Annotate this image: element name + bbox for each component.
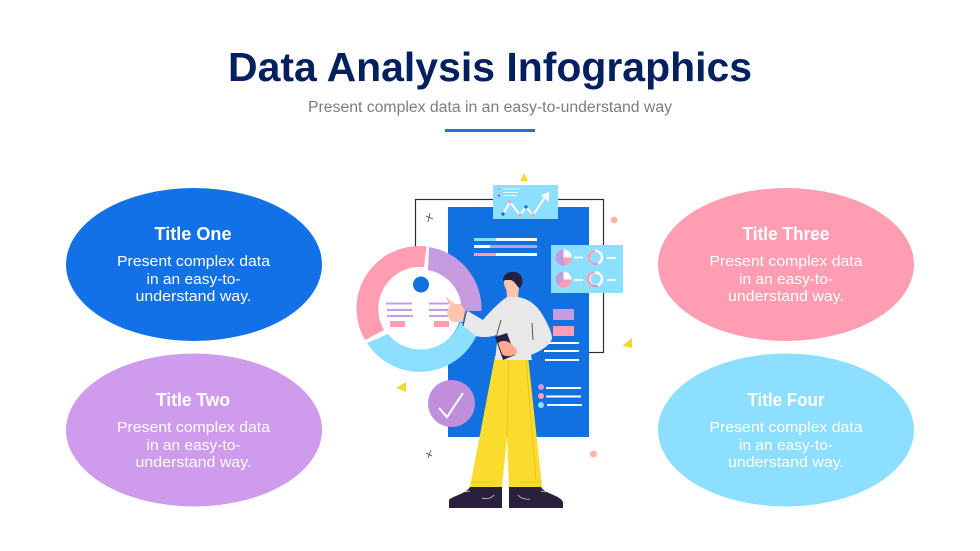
panel: title four: understand way. (728, 454, 844, 471)
accent line (445, 129, 535, 132)
decorative accents (396, 173, 632, 458)
line chart card (493, 185, 558, 219)
phone and hand (495, 333, 515, 360)
panel: title two: Title Two (156, 390, 230, 410)
panel: title two: understand way. (136, 454, 252, 471)
panel: title four: Title Four (748, 390, 824, 410)
illustration: analyst with charts (357, 173, 632, 508)
panel: title one (66, 188, 322, 341)
panel: title two: in an easy-to- (146, 437, 240, 454)
panel: title one: in an easy-to- (146, 271, 240, 288)
pie charts card (551, 245, 623, 293)
panel: title two (66, 354, 322, 506)
hand (445, 296, 465, 322)
document blocks and lines (538, 309, 582, 408)
document text bars (474, 238, 537, 256)
shoes (449, 487, 563, 508)
panel: title three: Present complex data (710, 253, 863, 270)
panel: title three: Title Three (742, 224, 830, 244)
panel: title three: understand way. (728, 288, 844, 305)
panel: title two: Present complex data (117, 419, 271, 436)
panel: title three: in an easy-to- (739, 271, 833, 288)
panel: title three (658, 188, 914, 341)
panel: title four: in an easy-to- (739, 437, 833, 454)
panel: title four (658, 354, 914, 506)
title: Data Analysis Infographics (228, 44, 752, 90)
person (445, 272, 563, 508)
panel: title one: Title One (154, 224, 232, 244)
neck and head (506, 284, 519, 298)
blue document panel (448, 207, 589, 437)
trousers (470, 356, 542, 487)
panel: title one: understand way. (136, 288, 252, 305)
donut chart (357, 246, 482, 372)
panel: title one: Present complex data (117, 253, 271, 270)
sweater and arm (463, 297, 552, 360)
outline frame (416, 200, 604, 352)
subtitle: Present complex data in an easy-to-understand way (308, 99, 672, 116)
check badge (428, 380, 475, 427)
panel: title four: Present complex data (710, 419, 863, 436)
